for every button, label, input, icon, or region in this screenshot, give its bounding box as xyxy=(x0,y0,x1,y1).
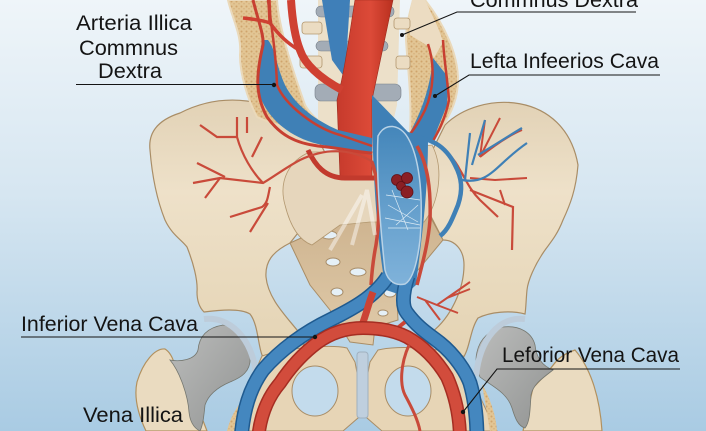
descending branch xyxy=(402,345,420,431)
left femur xyxy=(136,325,250,431)
red loop behind central vein xyxy=(308,150,378,178)
right small artery branches xyxy=(417,282,470,320)
right femoral head xyxy=(476,327,553,428)
label: Leforior Vena Cava: Leforior Vena Cava xyxy=(502,344,679,367)
label: Inferior Vena Cava: Inferior Vena Cava xyxy=(21,313,198,336)
central vein upper segment xyxy=(322,0,350,78)
left sectioned ilium xyxy=(228,0,338,136)
pubic symphysis xyxy=(357,352,368,418)
acetabular rims xyxy=(204,319,525,376)
outer red vessel xyxy=(253,0,372,153)
inner red vessel xyxy=(268,0,372,146)
inferior vena cava branches xyxy=(241,276,477,431)
left femoral head xyxy=(170,325,250,431)
translucent highlight rays xyxy=(330,190,375,250)
spongy bone edges xyxy=(227,384,497,431)
right wing arteries and veins xyxy=(412,118,527,250)
cartilage cap xyxy=(409,0,443,58)
fibrous mesh xyxy=(385,190,420,230)
aortic bifurcation branch xyxy=(291,0,342,90)
label: Arteria Illica: Arteria Illica xyxy=(76,12,192,35)
upper sacral bulge xyxy=(283,145,439,245)
sacral foramina xyxy=(321,231,396,316)
label: top right xyxy=(400,0,638,37)
intervertebral discs xyxy=(315,6,401,101)
left wing arteries xyxy=(193,117,373,232)
right femur xyxy=(476,327,602,431)
blood clots xyxy=(392,172,413,198)
transverse processes xyxy=(300,18,410,69)
label: Arteria Illica: Dextra xyxy=(98,60,162,83)
left iliac vein xyxy=(253,0,372,155)
thin artery right xyxy=(417,146,430,285)
label: Vena Illica: Vena Illica xyxy=(83,404,183,427)
pubic bones with obturator foramina xyxy=(227,346,497,431)
label: Arteria Illica xyxy=(76,12,276,87)
spine xyxy=(300,0,410,135)
label: Inferior Vena Cava xyxy=(21,313,317,339)
central dilated vein xyxy=(371,95,430,296)
aorta xyxy=(243,0,393,176)
obturator foramen left xyxy=(292,366,338,416)
obturator foramen right xyxy=(385,366,431,416)
label: Lefta Infeerios Cava: Lefta Infeerios Cava xyxy=(470,50,659,73)
right iliac bone xyxy=(415,102,578,358)
label: Arteria Illica: Commnus xyxy=(79,37,178,60)
arterial arch xyxy=(258,292,460,431)
right wing vein xyxy=(412,137,461,236)
right iliac vein xyxy=(408,40,449,141)
label: Lefta Infeerios Cava xyxy=(433,50,660,98)
thin artery left xyxy=(371,162,379,285)
right sectioned ilium xyxy=(406,0,458,140)
left iliac bone xyxy=(150,100,340,362)
label: Leforior Vena Cava xyxy=(461,344,680,414)
vein lumen xyxy=(377,126,421,284)
sacrum xyxy=(290,180,443,345)
